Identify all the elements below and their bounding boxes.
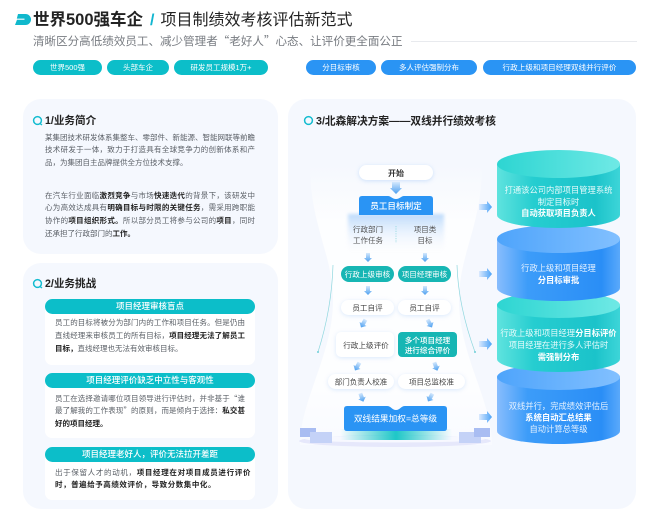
arrows: row 2 (364, 286, 429, 295)
split panel: target types: 项目类 (414, 224, 437, 234)
node: department calibration: 部门负责人校准 (335, 376, 388, 386)
text: background: 在汽车行业面临激烈竞争与市场快速迭代的背景下，该研发中 (45, 190, 255, 200)
subtitle: 清晰区分高低绩效员工、减少管理者“老好人”心态、让评价更全面公正 (33, 33, 402, 49)
text: 时，普遍给予高绩效评价，导致分数集中化。 (55, 480, 216, 489)
text: background: 心为高效达成具有明确目标与时限的关键任务，需采用跨职能 (45, 203, 255, 212)
text: 员工在选择邀请哪位项目领导进行评估时，并非基于“谁 (55, 392, 245, 404)
node: admin review: 行政上级审核 (345, 269, 391, 279)
card 3 header (45, 447, 255, 462)
cylinder 4: auto summary (497, 364, 620, 444)
node: self review left (341, 300, 394, 315)
heading: 1/业务简介 (45, 115, 96, 127)
tags: solution (306, 60, 636, 75)
text (55, 318, 245, 353)
text: 出于保留人才的动机，项目经理在对项目成员进行评价 (55, 468, 251, 476)
node: self review right: 员工自评 (409, 302, 440, 312)
heading: 2/业务挑战 (45, 278, 96, 290)
arrows: row 4 (352, 361, 441, 372)
node: set goals: 员工目标制定 (370, 200, 422, 211)
split panel: target types: 行政部门 (353, 224, 383, 234)
text: intro: 技术研发于一体，致力于打造具有全球竞争力的创新体系和产 (45, 145, 255, 154)
arrow (390, 182, 402, 194)
hourglass backdrop (300, 165, 492, 445)
cylinder 1: auto fetch: 打通该公司内部项目管理系统 (505, 185, 612, 195)
text (55, 392, 245, 428)
tags: company: 头部车企 (123, 63, 153, 72)
tags: company (33, 60, 268, 75)
text: 最了解我的工作表现”的原则，而是倾向于选择：私交甚 (55, 405, 245, 416)
node: admin evaluation: 行政上级评价 (343, 340, 389, 350)
arrows: to cylinders (479, 201, 492, 423)
text: intro: 某集团技术研发体系集整车、零部件、新能源、智能网联等前瞻 (45, 132, 255, 142)
node: set goals (359, 196, 433, 215)
card 2 header (45, 373, 255, 388)
tags: solution: 多人评估强制分布 (399, 63, 459, 72)
node: project calibration (398, 374, 465, 389)
icon: logo (15, 14, 31, 25)
cylinder 2: goal approval: 分目标审批 (538, 275, 580, 285)
icon: search ring (32, 116, 42, 126)
card 3 header: 项目经理老好人，评价无法拉开差距 (82, 449, 218, 459)
node: self review left: 员工自评 (352, 302, 383, 312)
platform (299, 428, 491, 447)
cylinder 3: forced distribution (497, 292, 620, 372)
panel: solution (288, 99, 636, 509)
tags: solution: 行政上级和项目经理双线并行评价 (503, 63, 616, 72)
node: weighted result: 双线结果加权=总等级 (354, 412, 437, 424)
node: weighted result (344, 406, 447, 431)
node: start (359, 165, 433, 180)
text: intro (45, 132, 255, 167)
tags: company: 世界500强 (50, 63, 85, 72)
node: project calibration: 项目总监校准 (409, 376, 454, 386)
cylinder 4: auto summary: 自动计算总等级 (529, 424, 588, 434)
arrows: row 5 (357, 392, 436, 403)
cylinder 4: auto summary: 系统自动汇总结果 (525, 412, 592, 422)
text: intro: 品，为集团自主品牌提供全方位技术支撑。 (45, 158, 188, 167)
arrows: row 1 (364, 253, 429, 262)
cylinder 1: auto fetch (497, 150, 620, 228)
panel: business intro (23, 99, 278, 254)
cylinder 4: auto summary: 双线并行，完成绩效评估后 (509, 401, 608, 411)
cylinder 2: goal approval: 行政上级和项目经理 (521, 263, 597, 273)
tags: company: 研发员工规模1万+ (190, 63, 252, 72)
node: PM review: 项目经理审核 (402, 269, 448, 279)
split panel: target types: 目标 (418, 235, 433, 245)
icon: search ring (32, 278, 42, 288)
node: PM review (398, 266, 451, 282)
node: multi PM evaluation (398, 332, 457, 357)
split panel: target types: 工作任务 (353, 235, 383, 245)
side arcs (317, 265, 476, 353)
text: 直线经理来审核员工的所有目标，项目经理无法了解员工 (55, 331, 245, 340)
text: 好的项目经理。 (55, 419, 108, 428)
tags: solution: 分目标审核 (322, 63, 360, 72)
text: 目标，直线经理也无法有效审核目标。 (55, 344, 182, 353)
node: multi PM evaluation: 多个项目经理 (405, 335, 451, 345)
heading: solution: 3/北森解决方案——双线并行绩效考核 (316, 114, 496, 128)
card 1 body (45, 307, 255, 365)
cylinder 3: forced distribution: 项目经理在进行多人评估时 (509, 340, 608, 350)
cylinder 3: forced distribution: 行政上级和项目经理分目标评价 (500, 328, 617, 338)
cylinder 3: forced distribution: 需强制分布 (538, 352, 579, 362)
node: admin review (341, 266, 394, 282)
node: admin evaluation (336, 332, 394, 357)
text: 员工的目标将被分为部门内的工作和项目任务。但是仍由 (55, 318, 245, 327)
node: department calibration (328, 374, 394, 389)
text: background: 还承担了行政部门的工作。 (45, 229, 135, 238)
arrows: row 3 (358, 318, 435, 329)
card 1 header: 项目经理审核盲点 (116, 301, 184, 311)
node: self review right (398, 300, 451, 315)
split panel: target types (348, 214, 444, 252)
card 2 header: 项目经理评价缺乏中立性与客观性 (86, 375, 214, 385)
card 3 body (45, 453, 255, 500)
title: 世界500强车企 / 项目制绩效考核评估新范式 (33, 11, 352, 29)
cylinder 2: goal approval (497, 225, 620, 301)
card 2 body (45, 380, 255, 438)
cylinder 1: auto fetch: 制定目标时 (538, 197, 579, 207)
text: background (45, 190, 255, 238)
panel: business challenges (23, 263, 278, 509)
node: multi PM evaluation: 进行综合评价 (405, 345, 451, 355)
text: background: 协作的项目组织形式。所以部分员工将参与公司的项目，同时 (45, 216, 255, 225)
text (55, 468, 251, 489)
cylinder 1: auto fetch: 自动获取项目负责人 (521, 208, 597, 218)
node: start: 开始 (388, 168, 404, 178)
card 1 header (45, 299, 255, 314)
